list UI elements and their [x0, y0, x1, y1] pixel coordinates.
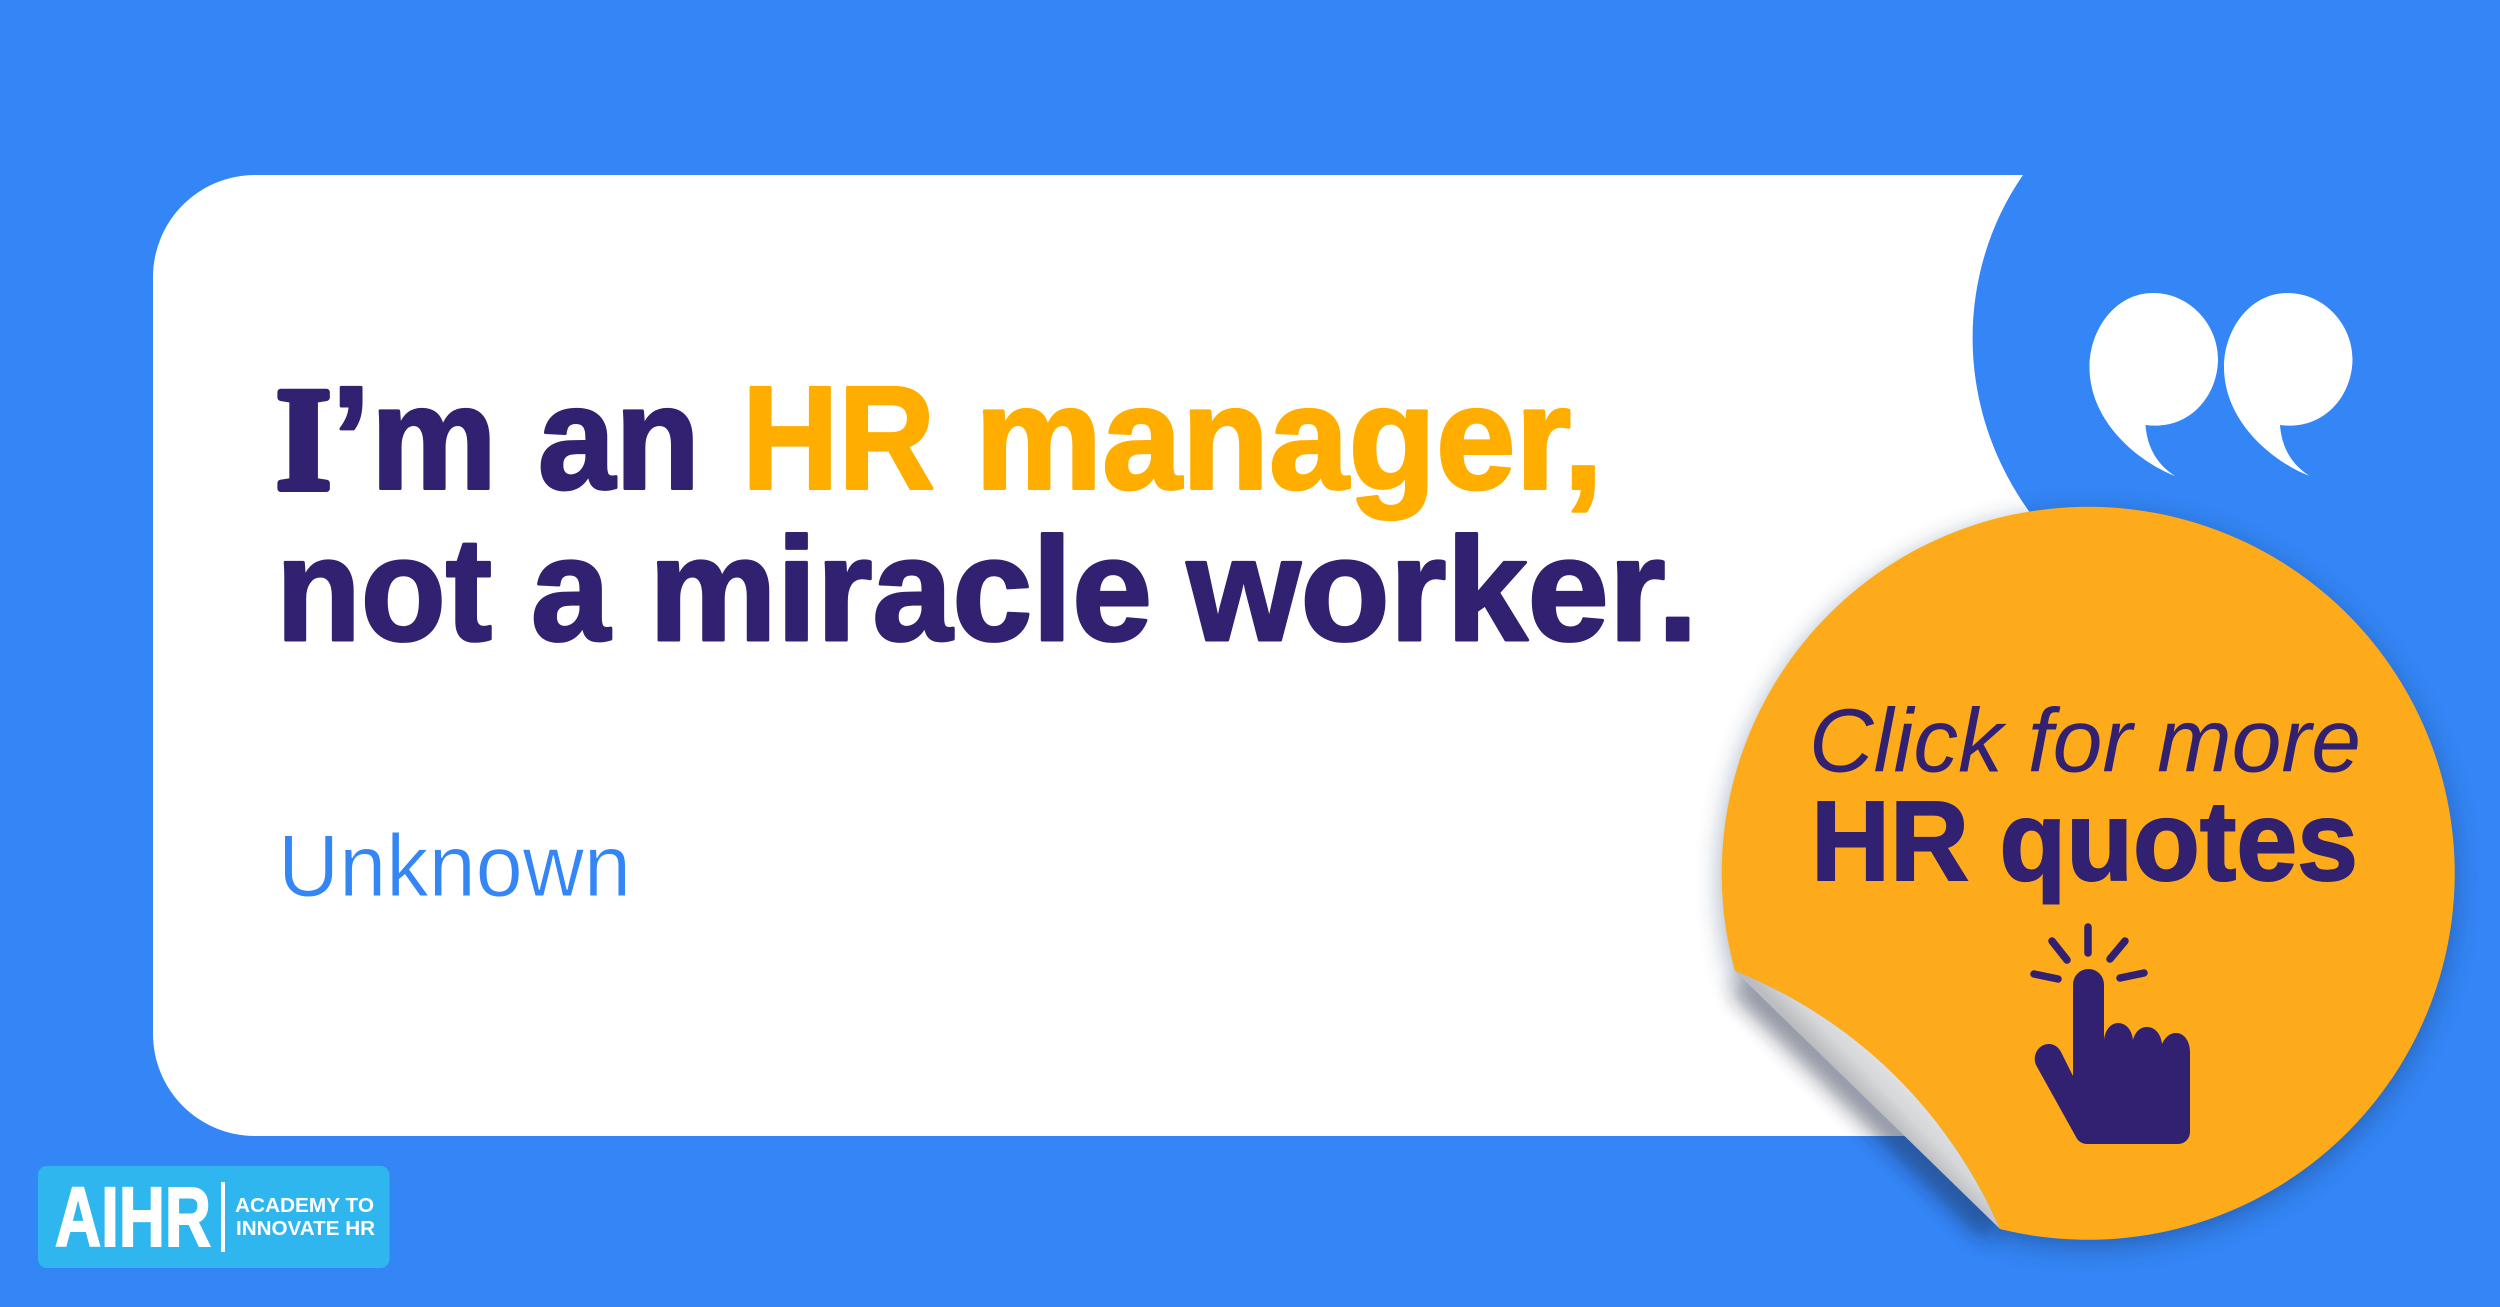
- quote line 2: not: [276, 508, 492, 672]
- logo wordmark: AIHR: [55, 1170, 211, 1264]
- logo badge: [38, 1166, 390, 1268]
- quote line 1: I’m: [276, 356, 497, 520]
- logo tagline: ACADEMY TO: [235, 1194, 374, 1217]
- peeled corner: [1735, 971, 2000, 1229]
- logo tagline: [235, 1194, 375, 1240]
- logo divider: [221, 1182, 225, 1252]
- logo tagline: INNOVATE HR: [236, 1217, 375, 1240]
- text: HR quotes: HR quotes: [1811, 778, 2358, 904]
- highlighted phrase: HR manager: HR: [742, 356, 935, 520]
- panel: white speech bubble: [153, 175, 2037, 1136]
- quote line 2: a: [531, 508, 611, 672]
- icon: closing quotation marks: [2090, 293, 2352, 476]
- text: Click for more: Click for more: [1809, 692, 2361, 792]
- quote line 2: worker.: [1186, 508, 1698, 672]
- highlighted phrase: HR manager: manager,: [975, 356, 1603, 520]
- icon: pointing hand with click rays: [2034, 927, 2190, 1144]
- quote line 1: [276, 356, 700, 520]
- logo: AIHR: [38, 1166, 390, 1268]
- quote line 2: miracle: [649, 508, 1152, 672]
- sticker shadow: [1722, 514, 2455, 1247]
- quote line 2: [276, 508, 1698, 672]
- click rays: [2034, 927, 2144, 979]
- quote text: [276, 356, 1698, 672]
- quote line 1: an: [538, 356, 700, 520]
- attribution: Unknown: Unknown: [278, 816, 631, 915]
- sticker circle: [1722, 507, 2455, 1240]
- sticker: call to action: [1722, 507, 2455, 1247]
